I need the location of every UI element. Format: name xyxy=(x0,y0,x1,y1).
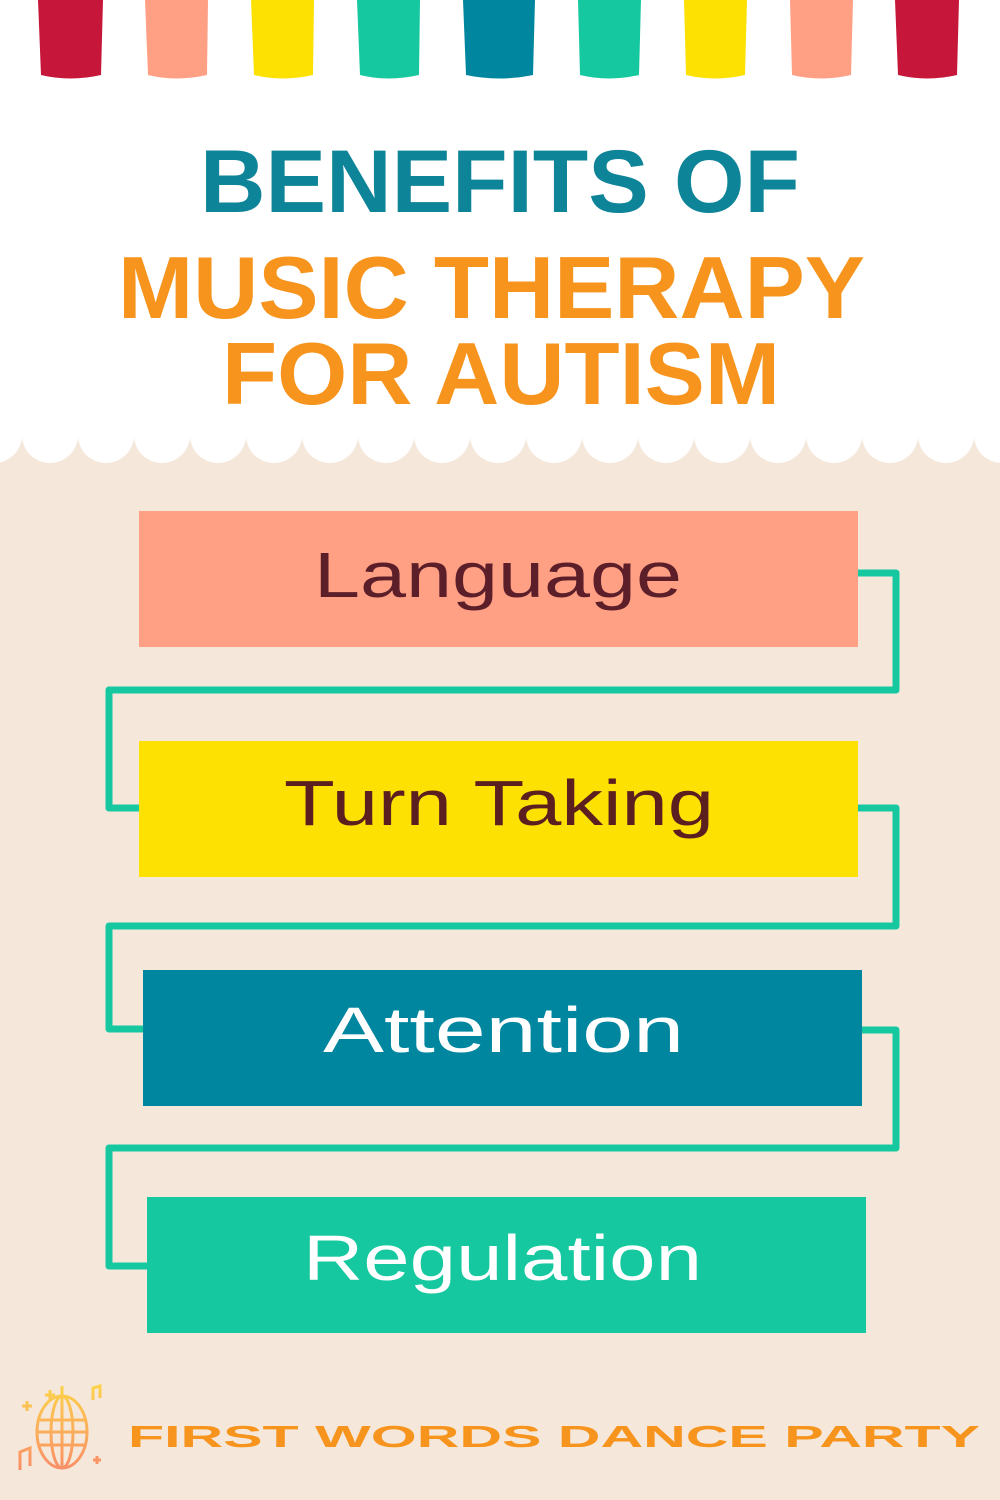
box: Regulation xyxy=(147,1197,866,1333)
background beige xyxy=(0,435,1000,1500)
scalloped edge xyxy=(0,0,1000,463)
title: MUSIC THERAPY xyxy=(118,238,865,337)
footer brand: FIRST WORDS DANCE PARTY xyxy=(128,1419,981,1454)
box: Language: Language xyxy=(314,539,682,611)
title xyxy=(118,131,865,423)
title: FOR AUTISM xyxy=(222,324,780,423)
icon: disco globe logo xyxy=(20,1386,101,1470)
box: Turn Taking: Turn Taking xyxy=(284,767,714,839)
box: Turn Taking xyxy=(139,741,858,877)
bunting tabs xyxy=(38,0,959,78)
box: Attention: Attention xyxy=(323,994,684,1066)
box: Language xyxy=(139,511,858,647)
box: Attention xyxy=(143,970,862,1106)
title: BENEFITS OF xyxy=(200,131,800,231)
connector lines xyxy=(109,573,896,1266)
box: Regulation: Regulation xyxy=(303,1222,702,1294)
